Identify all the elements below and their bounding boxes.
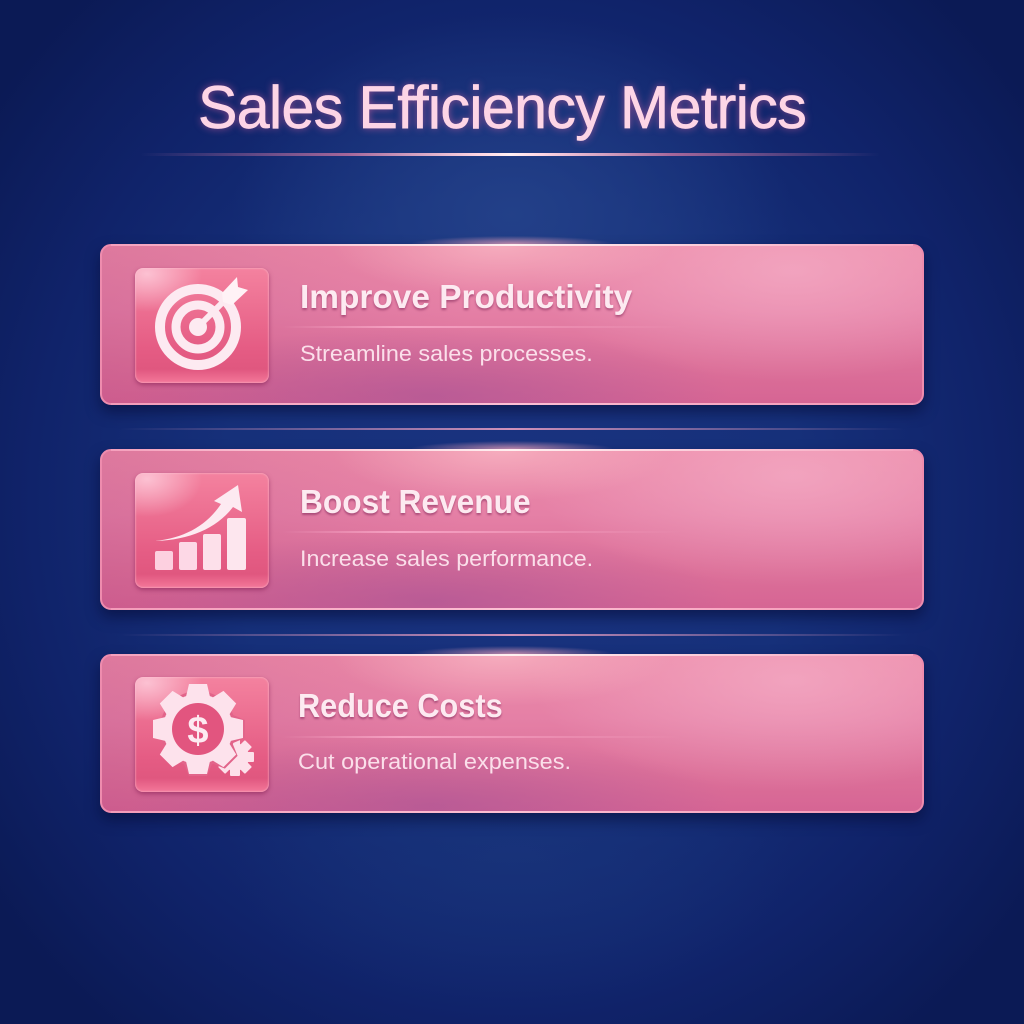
large gear xyxy=(160,691,245,776)
icon: bar chart with rising arrow xyxy=(135,473,269,588)
small gear xyxy=(216,738,254,776)
description: Streamline sales processes. xyxy=(300,341,593,366)
divider xyxy=(282,736,682,738)
panel: improve productivity xyxy=(100,244,924,405)
icon: gear with dollar sign xyxy=(135,677,269,792)
divider xyxy=(282,531,682,533)
panel: reduce costs xyxy=(100,654,924,813)
description: Increase sales performance. xyxy=(300,546,593,571)
heading: Reduce Costs xyxy=(298,687,503,724)
icon: target with arrow xyxy=(135,268,269,383)
icon: gear with dollar sign: $ xyxy=(187,710,209,752)
separator glow xyxy=(120,634,904,636)
title: Sales Efficiency Metrics xyxy=(198,74,806,141)
title underline glow xyxy=(140,153,880,156)
divider xyxy=(282,326,682,328)
separator glow xyxy=(120,428,904,430)
heading: Improve Productivity xyxy=(300,278,632,315)
description: Cut operational expenses. xyxy=(298,749,571,774)
panel: boost revenue xyxy=(100,449,924,610)
heading: Boost Revenue xyxy=(300,483,531,520)
